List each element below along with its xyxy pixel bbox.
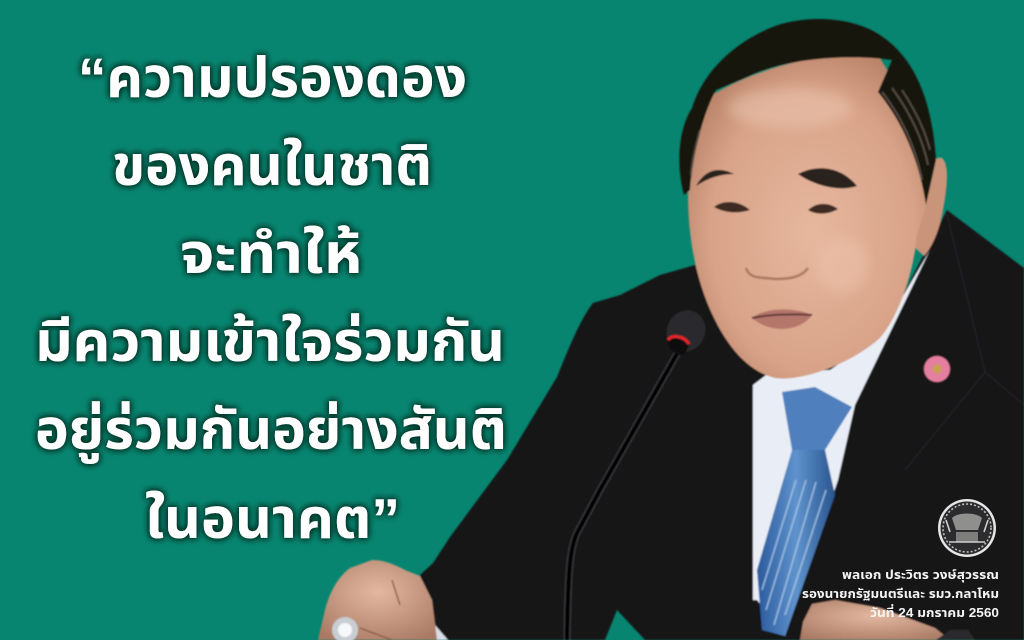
quote heading: จะทำให้: [180, 222, 362, 285]
icon: government seal: [938, 499, 996, 557]
quote heading: มีความเข้าใจร่วมกัน: [35, 310, 505, 373]
ear: [912, 158, 947, 256]
quote heading: อยู่ร่วมกันอย่างสันติ: [35, 398, 507, 464]
shirt collar: [753, 250, 930, 636]
attribution caption: วันที่ 24 มกราคม 2560: [870, 604, 999, 620]
lips: [752, 309, 812, 329]
jacket lapel: [905, 214, 1024, 470]
right hand: [800, 600, 950, 640]
lapel pin: [924, 356, 950, 382]
quote heading: ในอนาคต”: [145, 487, 400, 550]
cheek highlight: [816, 237, 868, 293]
face: [688, 55, 928, 379]
eyebrows: [696, 168, 857, 188]
portrait photo: man in suit: [318, 19, 1024, 640]
necktie: [757, 387, 852, 636]
quote heading: “ความปรองดอง: [78, 46, 467, 109]
attribution caption: รองนายกรัฐมนตรีและ รมว.กลาโหม: [802, 587, 999, 601]
suit jacket: [420, 210, 1024, 640]
quote heading: ของคนในชาติ: [112, 134, 432, 197]
left fist with ring: [318, 560, 437, 640]
forehead highlight: [728, 88, 852, 128]
nose: [746, 268, 808, 279]
wristwatch: [936, 630, 975, 640]
shirt cuff: [435, 625, 448, 640]
hair grey streaks: [691, 88, 930, 180]
attribution caption: พลเอก ประวิตร วงษ์สุวรรณ: [842, 568, 999, 582]
hair: [679, 19, 936, 205]
quote heading: [35, 46, 507, 550]
microphone: [567, 304, 712, 640]
attribution caption: [802, 568, 999, 620]
eyes: [714, 202, 838, 214]
